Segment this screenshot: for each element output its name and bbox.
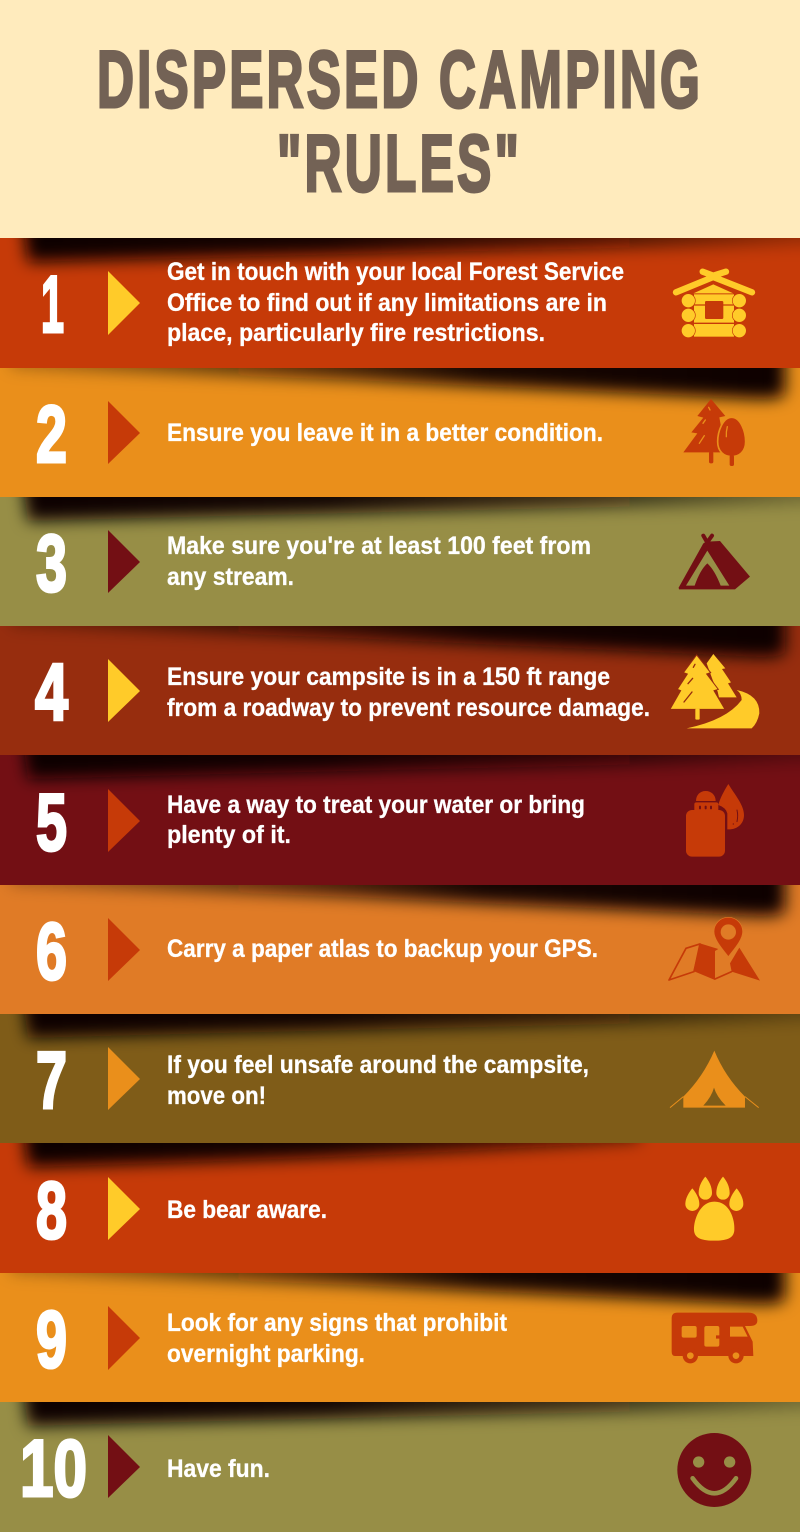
number 10: 10 [20,1424,87,1514]
icon: trees [683,399,746,466]
text 4: Ensure your campsite is in a 150 ft range [167,663,610,691]
text 2: Ensure you leave it in a better condition. [167,419,603,447]
number 9: 9 [36,1295,67,1385]
number 6: 6 [36,907,67,997]
panel: rule 5 [0,755,800,885]
arrow 9 [108,1306,140,1370]
icon: tent [679,536,750,589]
text 10: Have fun. [167,1455,270,1483]
panel: rule 9 [0,1273,800,1402]
icon: log cabin [676,272,752,338]
text 8: Be bear aware. [167,1196,327,1224]
panel: rule 2 [0,368,800,497]
title: "RULES" [277,119,522,209]
arrow 7 [108,1047,140,1110]
text 1: Get in touch with your local Forest Service [167,258,624,286]
text 3: any stream. [167,563,294,591]
arrow 6 [108,918,140,981]
icon: map and pin [669,917,760,981]
number 4: 4 [35,648,68,738]
arrow 3 [108,530,140,593]
panel: rule 6 [0,885,800,1014]
panel: rule 4 [0,626,800,755]
panel: rule 3 [0,497,800,626]
text 5: Have a way to treat your water or bring [167,791,585,819]
text 5: plenty of it. [167,821,291,849]
icon: bear paw [685,1177,743,1241]
panel: rule 10 [0,1402,800,1532]
panel: rule 7 [0,1014,800,1143]
text 7: move on! [167,1082,266,1110]
text 1: Office to find out if any limitations are in [167,289,607,317]
icon: smiley [677,1433,751,1507]
icon: canvas tent [670,1051,759,1108]
arrow 8 [108,1177,140,1240]
text 3: Make sure you're at least 100 feet from [167,532,591,560]
icon: pines and road [670,654,759,728]
text 7: If you feel unsafe around the campsite, [167,1051,589,1079]
text 9 [167,1309,508,1368]
arrow 10 [108,1435,140,1498]
panel: rule 1 [0,238,800,368]
text 7 [167,1051,589,1110]
text 6: Carry a paper atlas to backup your GPS. [167,935,598,963]
panel: rule 8 [0,1143,800,1273]
text 1: place, particularly fire restrictions. [167,319,545,347]
icon: camper van [672,1313,757,1363]
number 8: 8 [36,1166,67,1256]
arrow 2 [108,401,140,464]
title [97,35,703,209]
number 7: 7 [36,1036,67,1126]
text 1 [167,258,624,347]
text 3 [167,532,591,591]
text 9: overnight parking. [167,1340,365,1368]
icon: water bottle and drop [686,784,744,857]
text 4 [167,663,650,722]
number 2: 2 [36,390,67,480]
number 5: 5 [36,778,67,868]
arrow 5 [108,789,140,852]
text 4: from a roadway to prevent resource damage. [167,694,650,722]
text 5 [167,791,585,849]
number 3: 3 [36,519,67,609]
arrow 1 [108,271,140,335]
text 9: Look for any signs that prohibit [167,1309,508,1337]
arrow 4 [108,659,140,722]
number 1: 1 [41,260,64,350]
